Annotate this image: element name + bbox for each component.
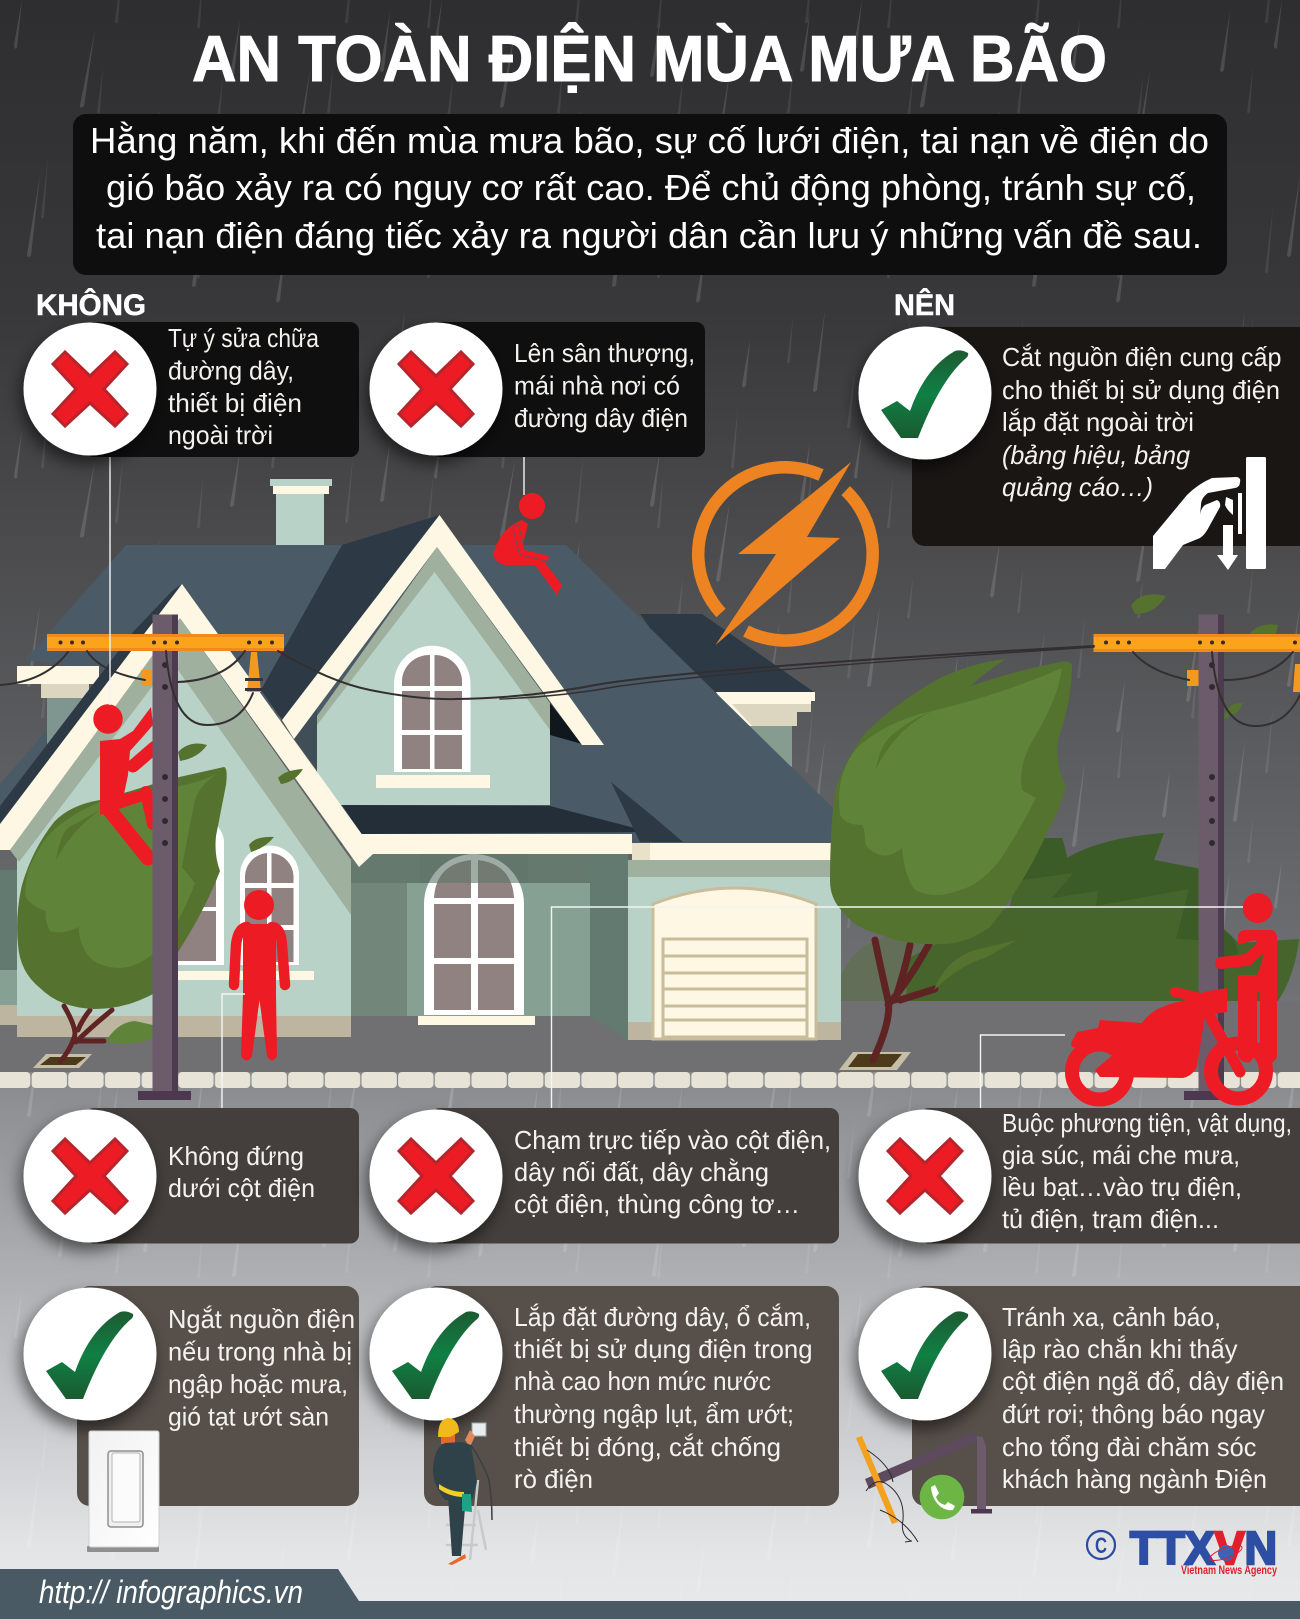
title: AN TOÀN ĐIỆN MÙA MƯA BÃO xyxy=(192,22,1107,95)
logo: TTXVN: TTXVN xyxy=(1130,1522,1277,1574)
street scene xyxy=(0,455,1300,1108)
panel: cut outdoor power: (bảng hiệu, bảng xyxy=(1002,440,1191,470)
road xyxy=(0,1001,1300,1072)
intro panel: Hằng năm, khi đến mùa mưa bão, sự cố lưới điện, tai nạn về điện do xyxy=(90,120,1209,161)
icon: fallen pole with phone xyxy=(856,1432,992,1542)
middle wall xyxy=(351,854,628,1040)
upper window xyxy=(376,646,490,788)
leaves left xyxy=(178,744,303,852)
footer xyxy=(0,1569,1300,1619)
figure: man with motorbike xyxy=(1071,893,1277,1100)
panel: cut outdoor power: lắp đặt ngoài trời xyxy=(1002,407,1194,437)
right wing roof xyxy=(640,614,834,845)
main roof xyxy=(25,545,834,845)
panel: do not touch pole: dây nối đất, dây chằng xyxy=(514,1157,769,1187)
garage door xyxy=(653,888,816,1039)
panel: cut power if flooded xyxy=(24,1286,359,1506)
connector lines xyxy=(110,455,1243,1108)
figure: man on roof xyxy=(493,493,562,595)
panel: cut power if flooded: ngập hoặc mưa, xyxy=(168,1369,348,1399)
leaves right xyxy=(1131,594,1278,719)
background bushes xyxy=(841,833,1299,1001)
icon: wall switch xyxy=(87,1431,159,1552)
panel: cut outdoor power xyxy=(858,326,1300,546)
panel: do not repair wiring outdoors: Tự ý sửa chữa xyxy=(168,323,319,353)
panel: cut outdoor power: Cắt nguồn điện cung cấp xyxy=(1002,342,1282,372)
panel: install wiring high: Lắp đặt đường dây, ổ cắm, xyxy=(514,1302,811,1332)
pole left xyxy=(47,614,284,1100)
panel: do not climb the roof: đường dây điện xyxy=(514,403,688,433)
panel: do not stand under pole: dưới cột điện xyxy=(168,1173,315,1203)
chimney xyxy=(270,479,332,548)
intro panel: tai nạn điện đáng tiếc xảy ra người dân cần lưu ý những vấn đề sau. xyxy=(96,215,1202,256)
pole right xyxy=(1094,614,1300,1100)
panel: cut outdoor power: cho thiết bị sử dụng điện xyxy=(1002,375,1280,405)
left windows xyxy=(165,815,314,980)
panel: stay away from fallen poles: cột điện ngã đổ, dây điện xyxy=(1002,1366,1284,1396)
panel: do not touch pole xyxy=(370,1108,839,1244)
left wing xyxy=(0,666,100,830)
panel: install wiring high xyxy=(370,1286,839,1506)
panel: do not tie things to pole: gia súc, mái che mưa, xyxy=(1002,1140,1240,1170)
heading: nên: NÊN xyxy=(894,288,955,322)
panel: do not touch pole: Chạm trực tiếp vào cột điện, xyxy=(514,1125,831,1155)
figure: man climbing pole xyxy=(93,704,155,858)
panel: stay away from fallen poles: Tránh xa, cảnh báo, xyxy=(1002,1302,1221,1332)
house xyxy=(0,515,841,1040)
panel: cut power if flooded: nếu trong nhà bị xyxy=(168,1336,352,1366)
panel: do not climb the roof: mái nhà nơi có xyxy=(514,370,680,400)
tree left xyxy=(17,767,227,1068)
logo: TTXVN: C xyxy=(1095,1533,1107,1558)
tree right xyxy=(830,659,1072,1070)
panel: do not tie things to pole: tủ điện, trạm điện... xyxy=(1002,1204,1219,1234)
panel: do not climb the roof: Lên sân thượng, xyxy=(514,338,695,368)
panel: do not repair wiring outdoors: đường dây, xyxy=(168,356,294,386)
panel: stay away from fallen poles: lập rào chắn khi thấy xyxy=(1002,1334,1238,1364)
panel: do not repair wiring outdoors: ngoài trời xyxy=(168,420,273,450)
panel: install wiring high: nhà cao hơn mức nước xyxy=(514,1366,771,1396)
panel: do not tie things to pole: lều bạt…vào trụ điện, xyxy=(1002,1172,1242,1202)
footer: http:// infographics.vn xyxy=(39,1574,303,1610)
panel: install wiring high: rò điện xyxy=(514,1464,593,1494)
panel: stay away from fallen poles xyxy=(858,1286,1300,1506)
power lines xyxy=(0,646,1300,726)
panel: do not stand under pole: Không đứng xyxy=(168,1141,304,1171)
panel: stay away from fallen poles: khách hàng ngành Điện xyxy=(1002,1464,1267,1494)
left gable xyxy=(0,584,373,1037)
panel: do not touch pole: cột điện, thùng công tơ… xyxy=(514,1189,800,1219)
panel: stay away from fallen poles: cho tổng đài chăm sóc xyxy=(1002,1432,1256,1462)
icon: lightning in circle xyxy=(698,462,873,645)
panel: install wiring high: thường ngập lụt, ẩm ướt; xyxy=(514,1399,794,1429)
icon: hand switching off xyxy=(1153,457,1266,570)
panel: install wiring high: thiết bị đóng, cắt chống xyxy=(514,1432,781,1462)
panel: cut power if flooded: gió tạt ướt sàn xyxy=(168,1402,329,1432)
big gable xyxy=(261,515,604,805)
panel: install wiring high: thiết bị sử dụng điện trong xyxy=(514,1334,812,1364)
icon: worker on ladder xyxy=(433,1418,492,1565)
panel: do not tie things to pole xyxy=(858,1108,1300,1244)
right wing wall xyxy=(361,834,841,1040)
panel: cut outdoor power: quảng cáo…) xyxy=(1002,472,1153,502)
panel: do not repair wiring outdoors xyxy=(24,322,359,457)
curb xyxy=(0,1072,1300,1088)
panel: do not stand under pole xyxy=(24,1108,359,1244)
panel: cut power if flooded: Ngắt nguồn điện xyxy=(168,1304,355,1334)
panel: stay away from fallen poles: đứt rơi; thông báo ngay xyxy=(1002,1399,1265,1429)
intro panel: gió bão xảy ra có nguy cơ rất cao. Để chủ động phòng, tránh sự cố, xyxy=(106,167,1196,208)
figure: man standing under pole xyxy=(234,890,285,1060)
middle window xyxy=(418,854,535,1025)
heading: không: KHÔNG xyxy=(36,288,146,322)
lower eave xyxy=(342,782,683,842)
panel: do not climb the roof xyxy=(370,322,705,457)
panel: do not repair wiring outdoors: thiết bị điện xyxy=(168,388,302,418)
intro panel xyxy=(73,114,1227,275)
